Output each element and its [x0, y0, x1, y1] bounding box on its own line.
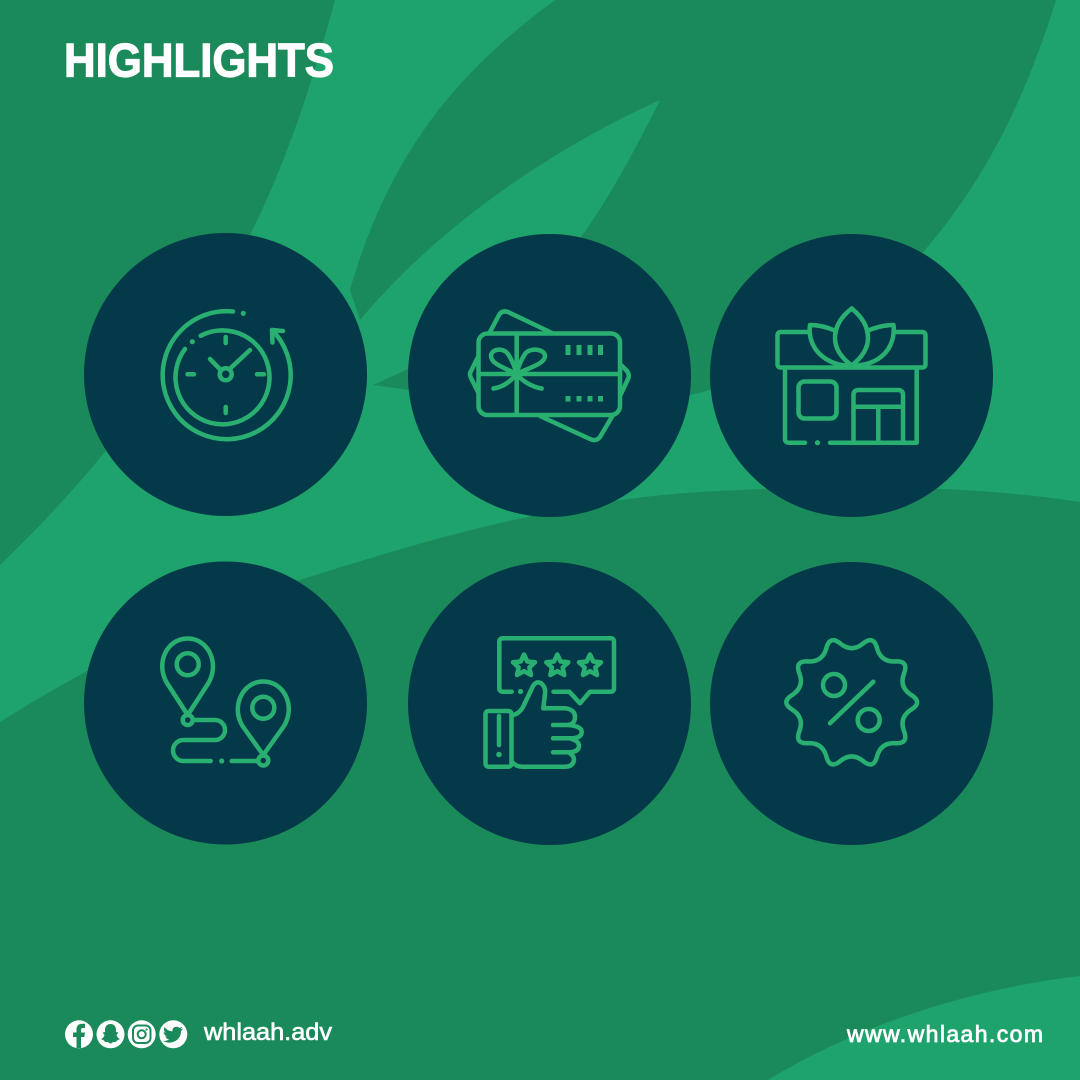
background shape: top-left leaf	[0, 0, 335, 565]
social icons	[65, 1020, 187, 1048]
background shape: top-right leaf	[350, 0, 1056, 405]
panel: store	[710, 234, 993, 517]
social handle: whlaah.adv	[203, 1019, 332, 1046]
icon: shop with lotus	[778, 308, 926, 445]
icon: instagram	[128, 1020, 156, 1048]
icon: snapchat	[96, 1020, 124, 1048]
icon: thumbs up with star rating	[486, 638, 614, 767]
icon: two map pins with route	[162, 638, 289, 766]
icon: twitter	[159, 1020, 187, 1048]
panel: clock	[84, 233, 367, 516]
panel: rating	[408, 562, 691, 845]
panel: route	[84, 562, 367, 844]
title: HIGHLIGHTS	[64, 34, 334, 88]
background shape: lower wave	[0, 487, 1080, 1080]
icon: facebook	[65, 1020, 93, 1048]
panel: discount	[710, 562, 993, 845]
icon: discount badge	[786, 640, 917, 764]
background shape: bottom-right corner	[768, 976, 1080, 1080]
website: www.whlaah.com	[846, 1021, 1043, 1047]
panel: gift cards	[408, 234, 691, 517]
icon: gift cards with bow	[470, 311, 629, 440]
icon: clock with rotation arrow	[163, 311, 291, 439]
